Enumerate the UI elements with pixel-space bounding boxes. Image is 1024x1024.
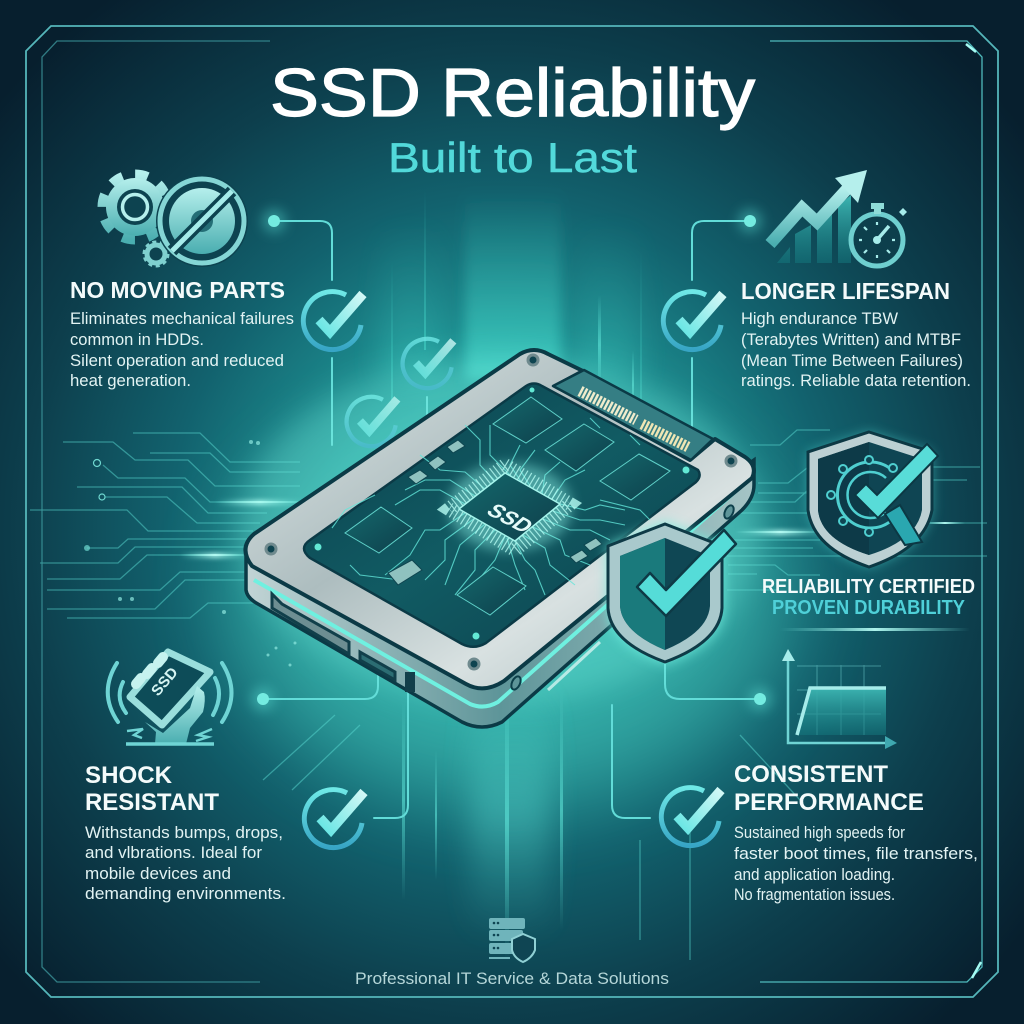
heading: reliability certified: RELIABILITY CERTIFIED [762,576,975,598]
icon: check badge [661,788,721,846]
shield with check on drive [607,522,736,664]
heading: no moving parts: NO MOVING PARTS [70,277,285,303]
icon: gears and disc [102,174,248,267]
heading: shock resistant [85,762,219,816]
text: shock resistant description [85,823,286,903]
chip label: SSD [481,499,539,537]
icon: certified shield [808,432,938,567]
panel: reliability certified [762,432,975,619]
icon: check badge [303,292,363,350]
text: longer lifespan description [741,309,971,390]
PCB board [304,384,700,647]
text: consistent performance description [734,823,978,904]
panel: longer lifespan [663,170,971,390]
icon: performance chart [782,649,897,749]
footer [355,918,669,988]
small components [388,440,602,585]
text: longer lifespan description: (Terabytes Written) and MTBF [741,330,961,349]
SSD drive [238,350,762,727]
text: consistent performance description: faster boot times, file transfers, [734,844,978,863]
subtitle: Built to Last [388,134,637,181]
text: longer lifespan description: ratings. Reliable data retention. [741,371,971,390]
title: SSD Reliability [270,55,755,131]
heading: consistent performance [734,761,924,816]
text: shock resistant description: mobile devices and [85,864,231,883]
text: no moving parts description: heat generation. [70,371,191,390]
text: shock resistant description: demanding environments. [85,884,286,903]
connector bracket [553,370,713,460]
text: shock resistant description: Withstands bumps, drops, [85,823,283,842]
ghost check: lower [347,397,397,446]
circuit traces [332,418,650,595]
text: consistent performance description: Sustained high speeds for [734,823,905,842]
drive glow [238,358,762,702]
subheading: proven durability: PROVEN DURABILITY [772,597,966,619]
text: longer lifespan description: (Mean Time Between Failures) [741,351,963,370]
heading: shock resistant: RESISTANT [85,789,219,816]
screws [266,355,736,669]
heading: shock resistant: SHOCK [85,762,173,789]
text: consistent performance description: and application loading. [734,865,895,884]
board vias [314,388,690,640]
ghost check: upper [403,339,453,388]
text: footer tagline: Professional IT Service & Data Solutions [355,969,669,988]
text: no moving parts description: Eliminates mechanical failures [70,309,294,328]
icon: hand gripping SSD [108,652,232,744]
top plate [245,350,754,688]
text: longer lifespan description: High endurance TBW [741,309,898,328]
text: shock resistant description: and vlbrations. Ideal for [85,843,262,862]
controller chip glow [448,463,572,551]
heading: consistent performance: CONSISTENT [734,761,888,788]
text: no moving parts description: common in HDDs. [70,330,204,349]
icon: check badge [663,292,723,350]
connector pins [580,391,688,447]
heading: consistent performance: PERFORMANCE [734,789,924,816]
icon: server with shield [489,918,535,962]
side connector ports [272,594,415,692]
icon: check badge [304,790,364,848]
icon: growth arrow, bars and stopwatch [770,170,907,266]
panel: no moving parts [70,174,363,390]
memory chips [345,397,670,615]
controller chip [459,473,560,541]
text: no moving parts description [70,309,294,390]
icon: hand gripping SSD: SSD [148,664,182,700]
text: no moving parts description: Silent operation and reduced [70,351,284,370]
panel: consistent performance [661,649,978,904]
connectors [251,209,772,818]
lower casing [246,460,754,727]
panel: shock resistant [85,652,364,903]
controller chip pins [449,465,570,550]
text: consistent performance description: No fragmentation issues. [734,885,895,904]
heading: longer lifespan: LONGER LIFESPAN [741,278,950,304]
